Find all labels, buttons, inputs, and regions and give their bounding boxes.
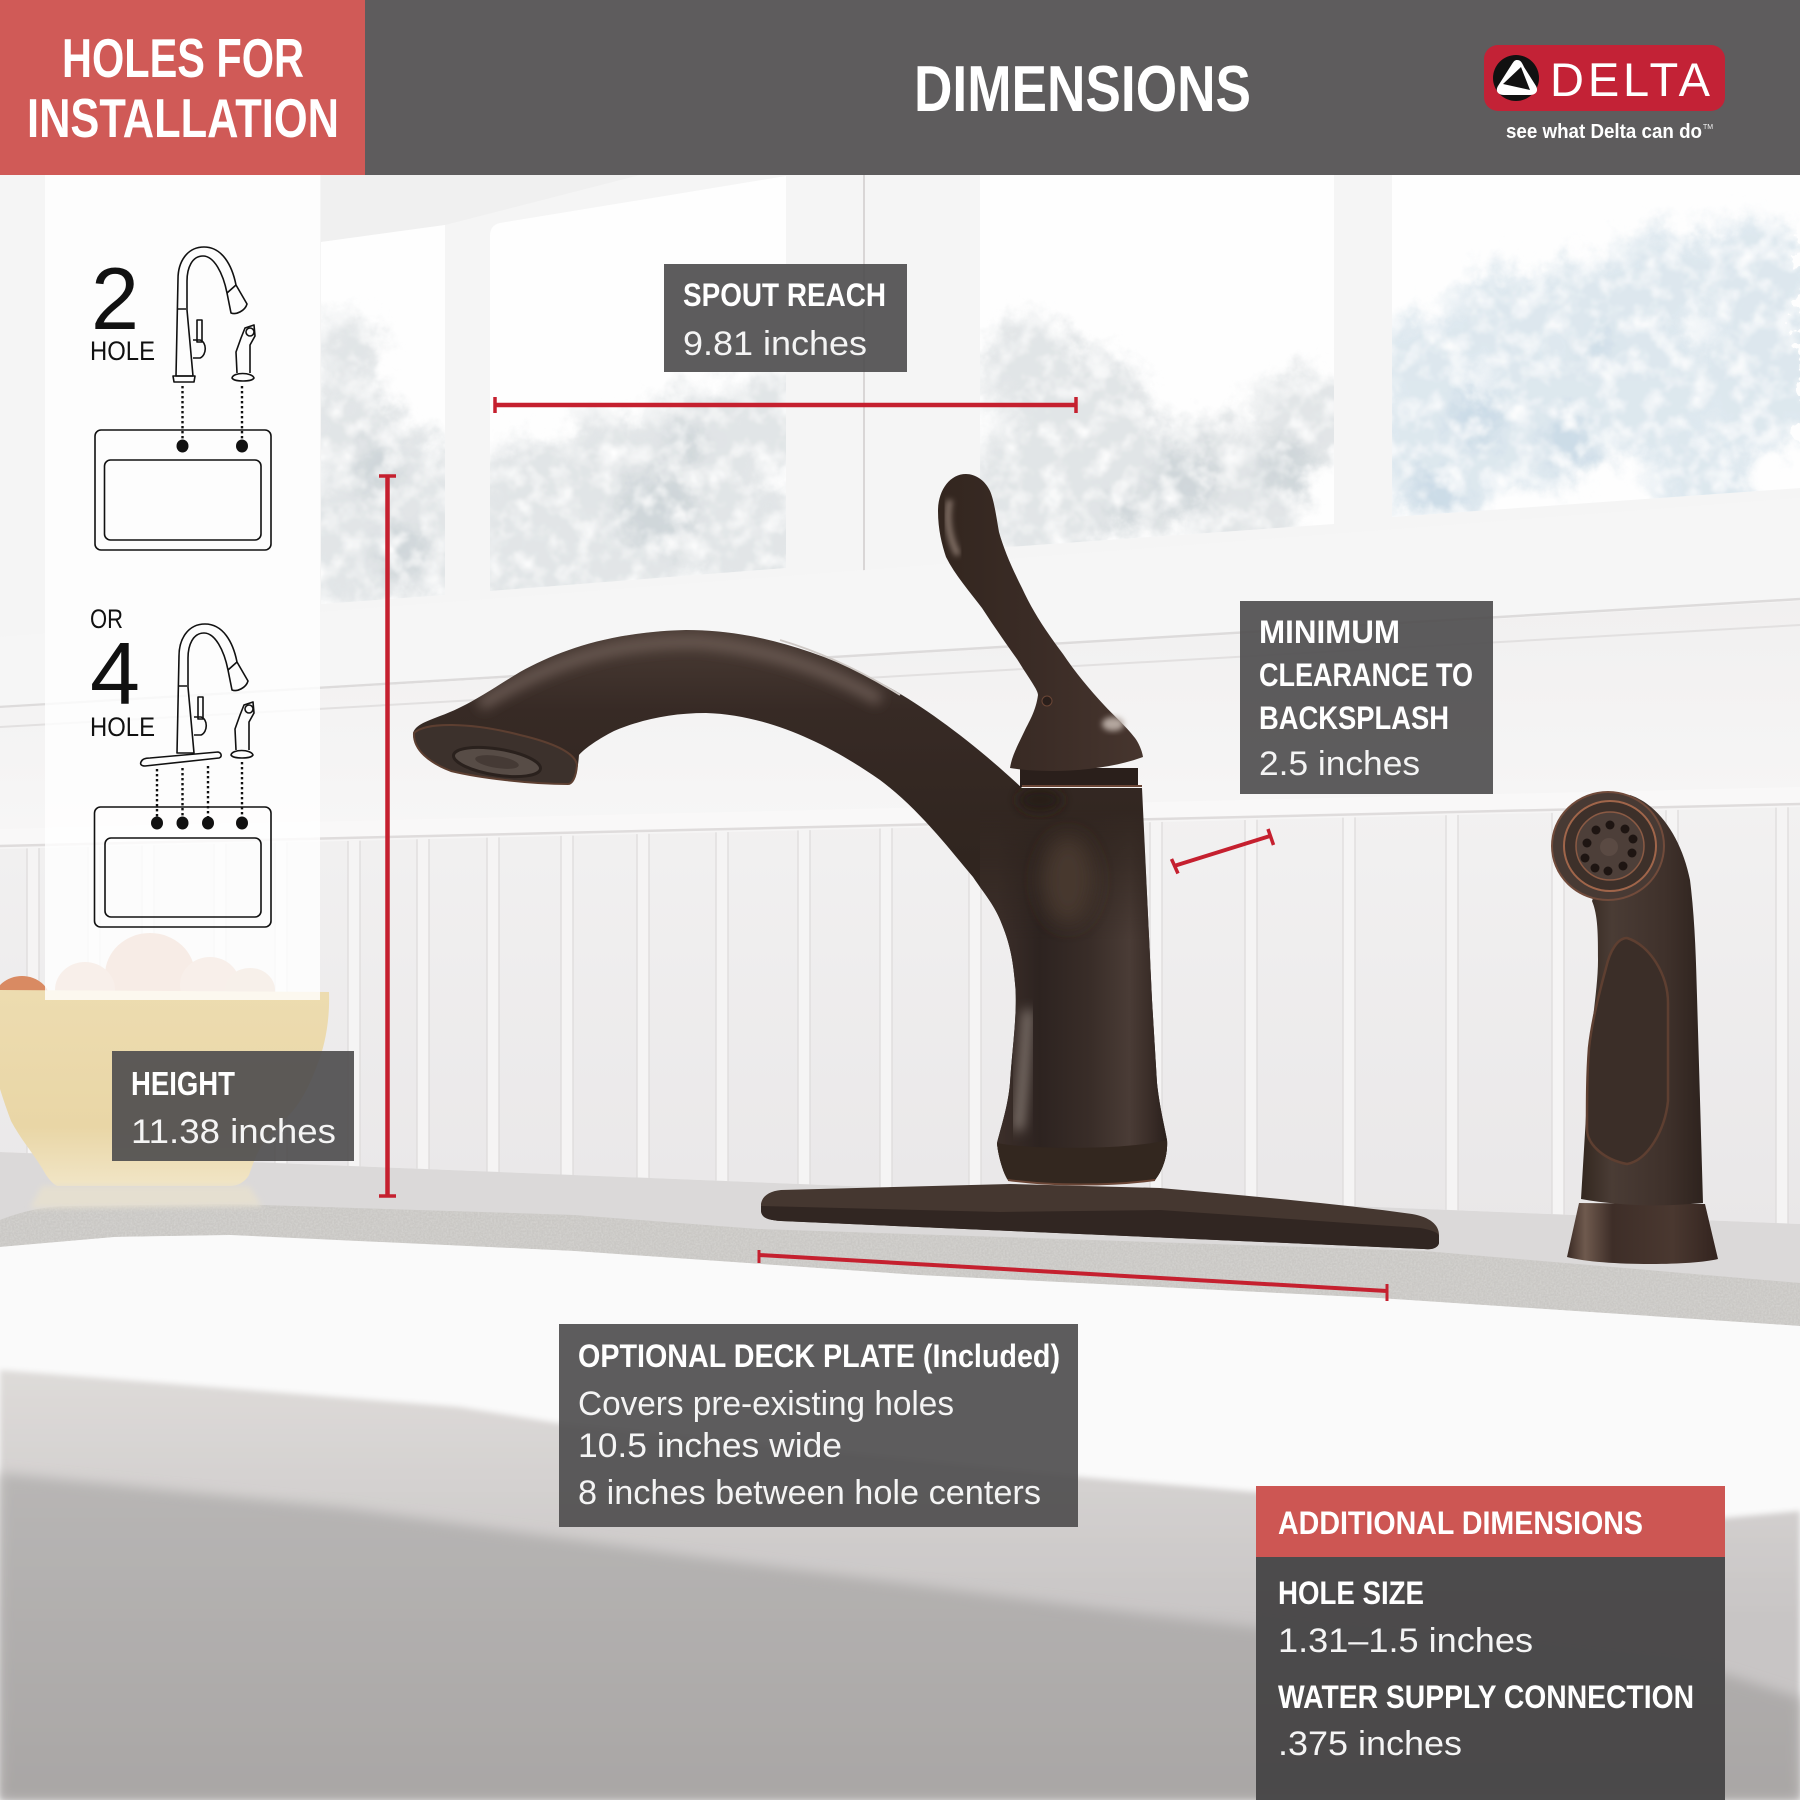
header: holes for installation: INSTALLATION xyxy=(27,87,339,149)
window top rail xyxy=(321,175,640,242)
label hole: HOLE xyxy=(90,336,155,366)
callout: optional deck plate: 8 inches between hole centers xyxy=(578,1474,1041,1512)
dimension bar: backsplash clearance xyxy=(1172,829,1274,874)
sprayer base xyxy=(1567,1203,1718,1264)
hole size xyxy=(1278,1575,1533,1660)
dotted guides xyxy=(182,386,242,446)
callout: minimum clearance: CLEARANCE TO xyxy=(1259,657,1473,693)
mullion line xyxy=(863,175,865,575)
main faucet xyxy=(413,474,1439,1249)
callout: height: HEIGHT xyxy=(131,1065,235,1102)
header: holes for installation xyxy=(0,0,365,175)
fruit in bowl xyxy=(0,933,275,1024)
dimension bar: height xyxy=(379,476,396,1196)
icon group: 2 hole xyxy=(90,247,271,550)
bowl reflection xyxy=(30,1186,262,1208)
callout: minimum clearance: 2.5 inches xyxy=(1259,745,1420,783)
bowl xyxy=(0,990,329,1186)
beadboard grooves xyxy=(27,800,1788,1230)
temperature indicator xyxy=(1042,696,1052,706)
holes xyxy=(151,816,248,830)
hole size: HOLE SIZE xyxy=(1278,1575,1424,1611)
counter front edge xyxy=(0,1204,1800,1326)
icon group: 4 hole xyxy=(90,604,271,927)
aerator face xyxy=(414,725,577,784)
callout: optional deck plate: Covers pre-existing holes xyxy=(578,1385,954,1423)
callout: spout reach: 9.81 inches xyxy=(683,325,867,363)
dimension bar: deck plate xyxy=(759,1250,1387,1301)
body base band xyxy=(997,1140,1167,1184)
callout: height xyxy=(112,1051,354,1161)
callout: minimum clearance: BACKSPLASH xyxy=(1259,700,1449,736)
sill lines xyxy=(0,599,1800,727)
basin shadow xyxy=(0,1370,1800,1800)
panel heading: ADDITIONAL DIMENSIONS xyxy=(1278,1505,1643,1541)
callout: optional deck plate xyxy=(559,1324,1078,1527)
spout and body xyxy=(413,630,1167,1180)
wall rail xyxy=(0,787,1800,845)
panel: additional dimensions xyxy=(1256,1486,1725,1800)
number 2: 2 xyxy=(91,249,139,348)
Delta logo: TM xyxy=(1703,124,1713,131)
sprayer body xyxy=(1581,795,1703,1205)
faucet outline xyxy=(173,247,247,382)
title: DIMENSIONS xyxy=(914,52,1251,125)
faucet shading xyxy=(480,642,1180,1190)
header: holes for installation: HOLES FOR xyxy=(62,27,304,89)
collar xyxy=(1020,768,1142,787)
number 4: 4 xyxy=(90,624,140,723)
dotted guides xyxy=(157,762,242,823)
callout: minimum clearance: MINIMUM xyxy=(1259,614,1400,650)
holes xyxy=(176,440,248,452)
Delta logo: see what Delta can do xyxy=(1506,121,1702,143)
handle knob highlight xyxy=(1102,717,1124,731)
sink outline xyxy=(94,807,271,927)
deck plate outline xyxy=(141,752,221,766)
handle highlight xyxy=(948,500,958,555)
trees outside window xyxy=(290,220,1800,630)
hole size: 1.31–1.5 inches xyxy=(1278,1622,1533,1660)
sprayer trigger xyxy=(1587,938,1668,1164)
deck plate xyxy=(761,1184,1439,1249)
label hole: HOLE xyxy=(90,712,155,742)
upper wall xyxy=(0,601,1800,830)
callout: spout reach xyxy=(664,264,907,372)
spout edge glint xyxy=(780,640,900,695)
faucet outline xyxy=(177,624,248,753)
callout: spout reach: SPOUT REACH xyxy=(683,277,886,313)
sink outline xyxy=(95,430,271,550)
countertop surface xyxy=(0,1152,1800,1290)
water supply connection: .375 inches xyxy=(1278,1725,1462,1763)
water supply connection: WATER SUPPLY CONNECTION xyxy=(1278,1679,1694,1715)
label or: OR xyxy=(90,604,123,634)
side sprayer xyxy=(1552,792,1718,1264)
installation panel xyxy=(45,175,320,1000)
sprayer outline xyxy=(231,702,254,758)
callout: height: 11.38 inches xyxy=(131,1113,336,1151)
panel heading xyxy=(1256,1486,1725,1557)
callout: optional deck plate: 10.5 inches wide xyxy=(578,1427,842,1465)
basin deep shadow xyxy=(0,1473,1800,1800)
window glass sky xyxy=(290,175,1800,630)
sprayer head xyxy=(1552,792,1664,900)
beadboard wall xyxy=(0,807,1800,1224)
window sill xyxy=(0,498,1800,707)
lever handle xyxy=(938,474,1143,771)
sprayer outline xyxy=(232,325,255,381)
sink basin xyxy=(0,1235,1800,1800)
Delta logo: DELTA xyxy=(1550,53,1711,106)
dimension bar: spout reach xyxy=(495,397,1076,413)
window frame xyxy=(0,175,1800,650)
callout: optional deck plate: OPTIONAL DECK PLATE (Included) xyxy=(578,1338,1060,1374)
Delta logo xyxy=(1484,45,1725,143)
header bar xyxy=(365,0,1800,175)
callout: minimum clearance xyxy=(1240,601,1493,794)
water supply connection xyxy=(1278,1679,1694,1763)
